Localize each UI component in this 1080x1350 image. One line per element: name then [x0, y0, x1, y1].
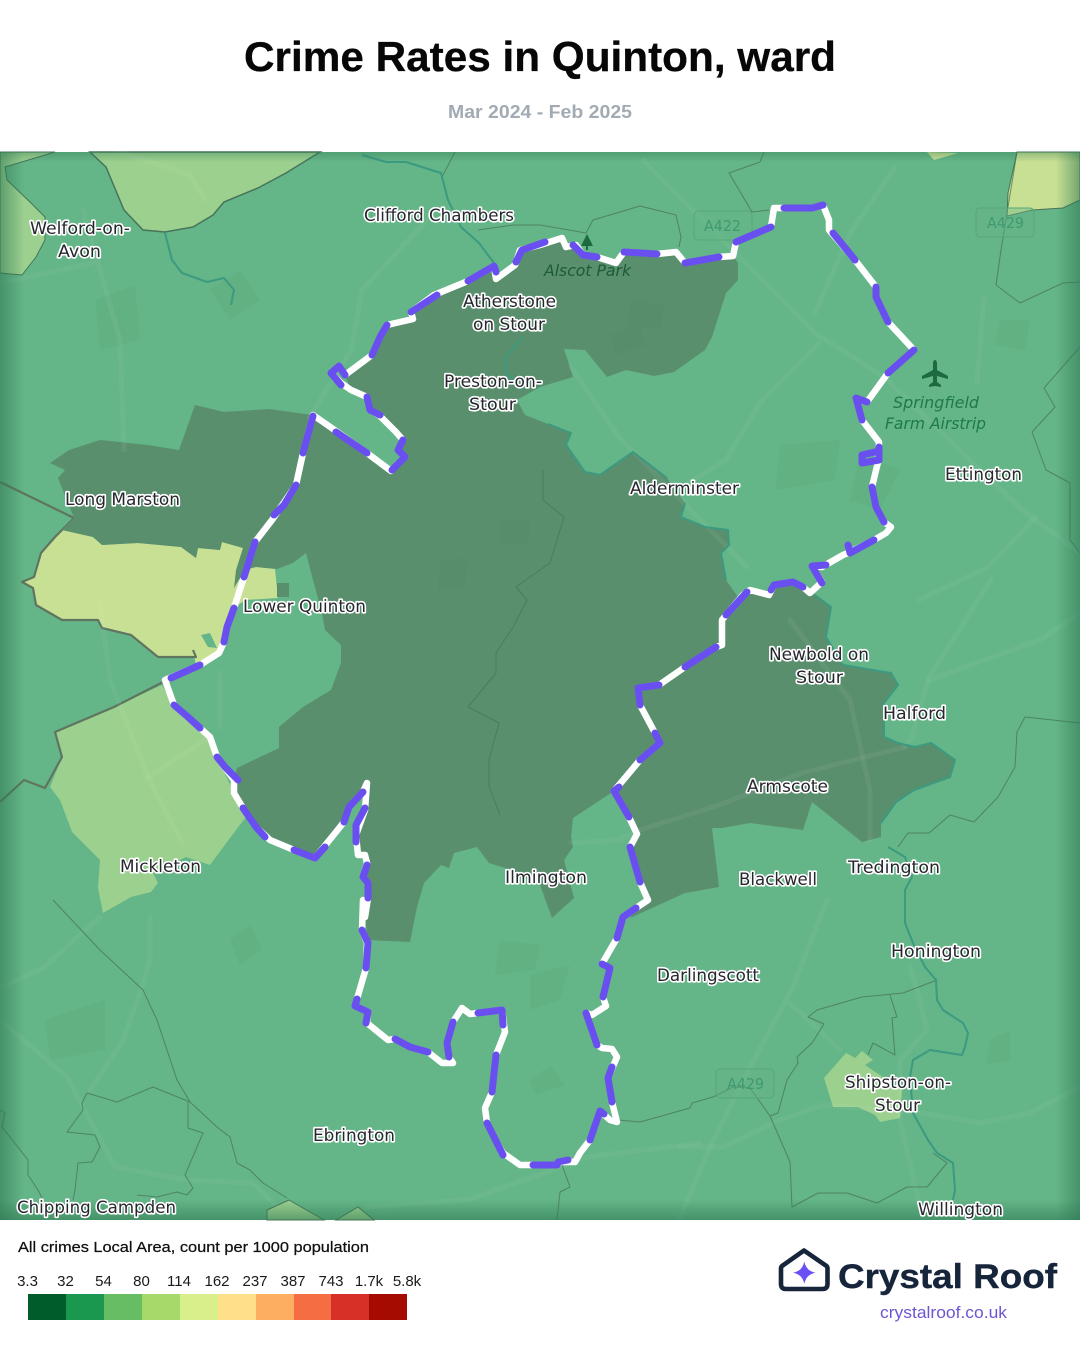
place label: Halford: Halford	[883, 704, 946, 724]
rivers	[165, 155, 968, 1200]
area: top pale sliver	[927, 152, 958, 160]
place label: Welford-on-Avon: Welford-on-	[30, 219, 130, 239]
icon: airstrip plane	[922, 360, 948, 387]
roads	[0, 152, 1080, 1220]
place label: Mickleton: Mickleton	[120, 857, 201, 877]
place label: Shipston-on-Stour: Shipston-on-	[845, 1073, 951, 1093]
area: Mickleton light green	[50, 685, 246, 913]
place label: Alscot Park: Alscot Park	[543, 261, 632, 280]
legend scale numbers: 743	[318, 1273, 344, 1290]
place label: Ebrington: Ebrington	[313, 1126, 395, 1146]
dark block near Lower Quinton	[277, 583, 289, 597]
place label: Lower Quinton: Lower Quinton	[243, 597, 366, 617]
place label: Armscote: Armscote	[747, 777, 828, 797]
legend scale numbers: 1.7k	[355, 1273, 384, 1290]
place label: Honington: Honington	[891, 942, 981, 962]
edge vignette	[0, 152, 1080, 1220]
legend scale numbers	[17, 1273, 422, 1290]
place label: Welford-on-Avon: Avon	[58, 242, 101, 262]
legend scale numbers: 162	[204, 1273, 230, 1290]
place label: Atherstone on Stour: on Stour	[473, 315, 545, 335]
place label: Atherstone on Stour: Atherstone	[463, 292, 556, 312]
area: Shipston light green	[824, 1051, 902, 1122]
place label: Tredington: Tredington	[847, 858, 940, 878]
subtitle: date range: Mar 2024 - Feb 2025	[448, 101, 632, 122]
field patches	[45, 270, 1030, 1095]
ward boundary: white outline	[165, 205, 914, 1165]
place label: Darlingscott: Darlingscott	[657, 966, 759, 986]
road shield: A422: A422	[704, 217, 741, 235]
website url: crystalroof.co.uk	[880, 1304, 1008, 1322]
title: Crime Rates in Quinton, ward	[244, 33, 836, 80]
road shield: A429 south: A429	[727, 1075, 764, 1093]
area: Long Marston pale yellow	[22, 530, 278, 665]
area: top-left light green	[90, 152, 320, 232]
legend scale numbers: 54	[95, 1273, 112, 1290]
road shield: A429 south	[716, 1069, 774, 1098]
place label: Long Marston: Long Marston	[65, 490, 180, 510]
place label: Chipping Campden: Chipping Campden	[17, 1198, 176, 1218]
place label: Ilmington: Ilmington	[505, 868, 587, 888]
place label: Preston-on-Stour: Preston-on-	[444, 372, 542, 392]
legend scale numbers: 32	[57, 1273, 74, 1290]
thick district borders	[0, 482, 196, 802]
place label: Shipston-on-Stour: Stour	[875, 1096, 920, 1116]
place label: Preston-on-Stour	[444, 372, 542, 415]
logo: Crystal Roof	[781, 1250, 1058, 1322]
icon: house with star	[781, 1250, 828, 1289]
road shield: A429 north: A429	[987, 214, 1024, 232]
place label: Shipston-on-Stour	[845, 1073, 951, 1116]
place label: Springfield Farm Airstrip	[885, 393, 986, 433]
map panel	[0, 152, 1080, 1220]
place label: Springfield Farm Airstrip: Farm Airstrip	[885, 414, 986, 433]
place label: Atherstone on Stour	[463, 292, 556, 335]
legend scale numbers: 114	[167, 1273, 191, 1290]
legend scale numbers: 5.8k	[393, 1273, 422, 1290]
place label: Clifford Chambers: Clifford Chambers	[364, 206, 514, 226]
legend scale numbers: 3.3	[17, 1273, 38, 1290]
legend title: All crimes Local Area, count per 1000 population	[18, 1239, 369, 1256]
place label: Springfield Farm Airstrip: Springfield	[893, 393, 980, 412]
legend	[17, 1239, 422, 1320]
road shield: A429 north	[976, 208, 1034, 237]
road shield: A422	[694, 211, 752, 240]
area: small patch inside pale yellow	[201, 633, 217, 648]
legend scale numbers: 237	[242, 1273, 268, 1290]
place label: Blackwell: Blackwell	[739, 870, 817, 890]
place label: Newbold on Stour	[769, 645, 869, 688]
place label: Newbold on Stour: Stour	[796, 668, 843, 688]
place label: Willington: Willington	[918, 1200, 1003, 1220]
ward boundary: purple dashes	[171, 205, 914, 1165]
area: below-average dark zone (Quinton surroundings)	[50, 238, 955, 942]
place label: Preston-on-Stour: Stour	[469, 395, 516, 415]
legend scale numbers: 80	[133, 1273, 150, 1290]
area: far top-left light green	[0, 152, 55, 275]
legend scale numbers: 387	[280, 1273, 306, 1290]
legend colour bar	[28, 1294, 407, 1320]
thin parish boundaries	[0, 152, 1080, 1220]
place label: Alderminster: Alderminster	[630, 479, 739, 499]
area: bottom light green patches	[267, 1200, 374, 1220]
place label: Welford-on-Avon	[30, 219, 130, 262]
map base: local area green	[0, 152, 1080, 1220]
icon: park tree marker	[581, 234, 593, 250]
area: top-right pale yellow	[1007, 152, 1080, 216]
place label: Ettington: Ettington	[945, 465, 1022, 485]
wordmark: Crystal Roof	[838, 1258, 1058, 1296]
place label: Newbold on Stour: Newbold on	[769, 645, 869, 665]
